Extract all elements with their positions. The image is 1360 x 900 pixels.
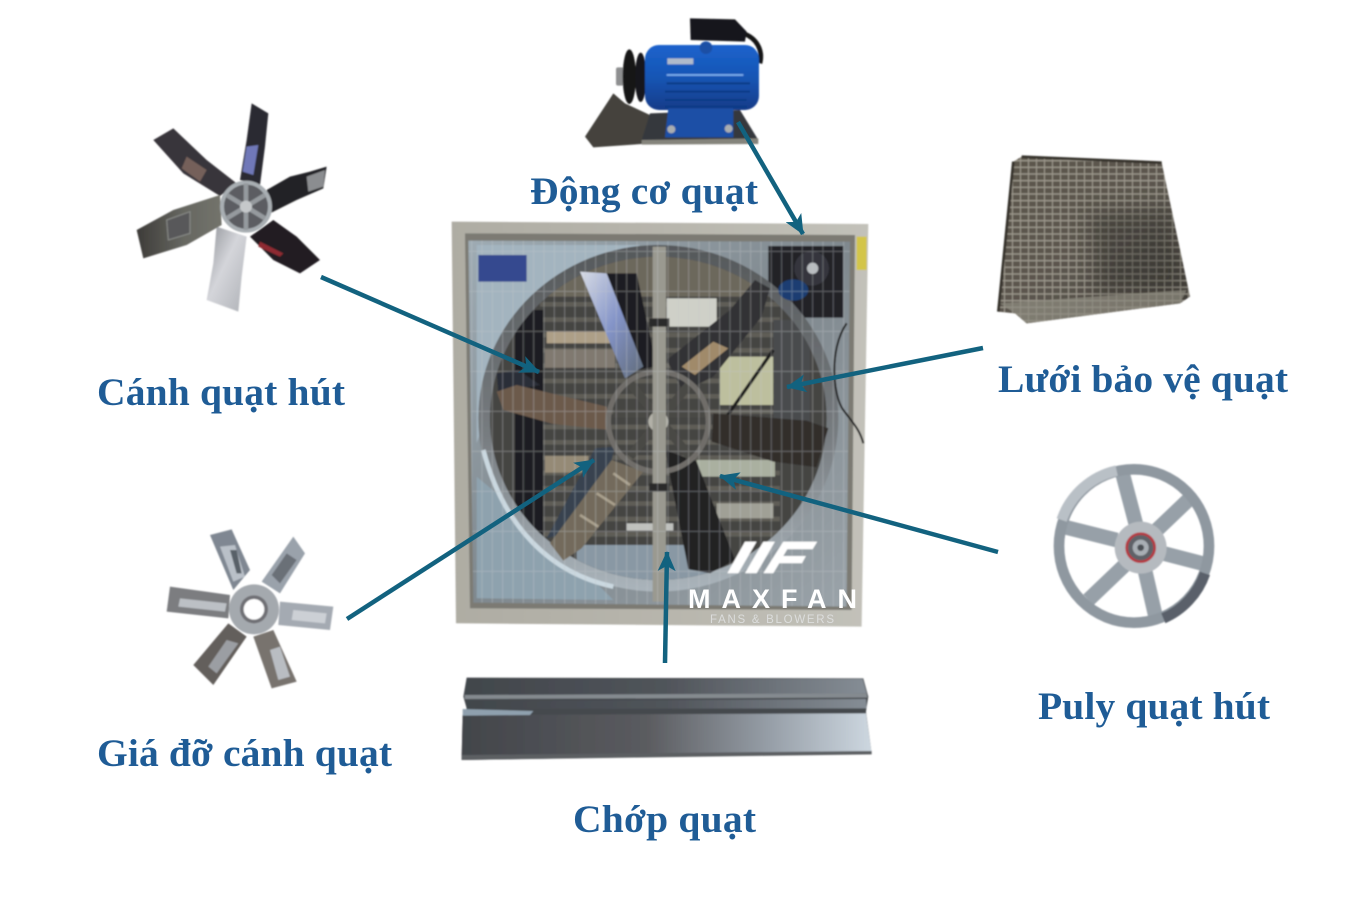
label: blade bracket: Giá đỡ cánh quạt (97, 731, 392, 775)
blade: lower left (547, 447, 643, 561)
blade: upper right (667, 280, 773, 417)
logo wordmark: FANS & BLOWERS (710, 614, 834, 626)
arrow: blades (321, 277, 539, 372)
label: shutter: Chớp quạt (573, 797, 756, 841)
blade: left (497, 370, 610, 430)
motor pulley (778, 251, 829, 301)
photo: pulley (1059, 469, 1209, 623)
photo: protective mesh (998, 157, 1190, 323)
logo wordmark: MAXFAN (688, 584, 857, 614)
louvers seen through the drum (514, 256, 810, 580)
label: fan blades: Cánh quạt hút (97, 370, 345, 414)
power cable (834, 323, 863, 443)
blade: right (712, 413, 828, 467)
yellow sticker (857, 237, 867, 270)
blade: mirror (580, 272, 657, 378)
photo: motor (585, 18, 761, 147)
arrow: bracket (347, 460, 594, 619)
photo: blade bracket (167, 529, 333, 688)
main fan photo (452, 222, 868, 627)
label: protective mesh: Lưới bảo vệ quạt (998, 357, 1288, 401)
arrow: mesh (787, 348, 983, 387)
label: motor: Động cơ quạt (530, 169, 758, 213)
photo: fan blades (137, 103, 327, 312)
arrow: motor (738, 122, 803, 234)
arrow: shutter (665, 552, 667, 663)
blade support wheel (608, 372, 708, 472)
drum interior (490, 257, 827, 580)
photo: louver shutter (462, 678, 872, 760)
arrow: pulley (720, 476, 998, 552)
wire guard (468, 241, 850, 607)
fan back panel (468, 241, 850, 607)
motor bay (768, 246, 843, 318)
blade: lower right (665, 450, 735, 573)
centre bar (649, 247, 669, 602)
logo mark (727, 542, 817, 573)
fan frame (452, 222, 868, 627)
drum ring (478, 245, 838, 592)
label: pulley: Puly quạt hút (1038, 684, 1270, 728)
data plate (478, 255, 527, 282)
ring highlight (483, 450, 613, 587)
